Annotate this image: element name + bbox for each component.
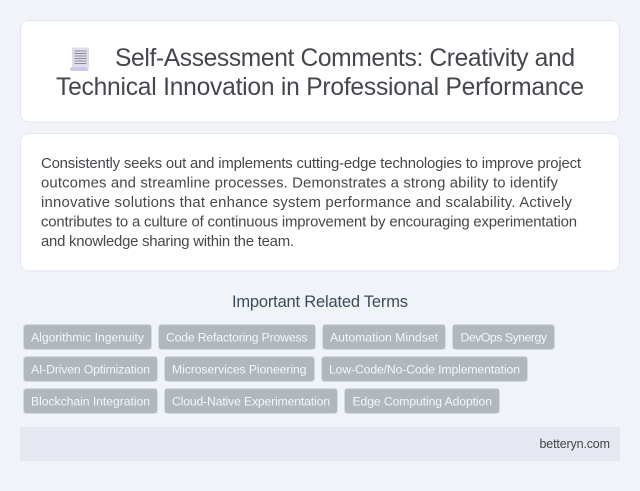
tag xyxy=(164,356,314,382)
description text: innovative solutions that enhance system performance and scalability. Actively xyxy=(41,195,573,211)
tag xyxy=(24,324,152,350)
title xyxy=(56,45,584,101)
description text: Consistently seeks out and implements cutting-edge technologies to improve project xyxy=(41,156,582,172)
tag: Code Refactoring Prowess xyxy=(166,330,308,344)
tag: Microservices Pioneering xyxy=(172,362,306,376)
description text: and knowledge sharing within the team. xyxy=(41,234,294,250)
icon: scroll document xyxy=(70,48,89,71)
tag: Low-Code/No-Code Implementation xyxy=(329,362,520,376)
tag xyxy=(24,356,158,382)
tag xyxy=(452,324,554,350)
tag xyxy=(322,356,528,382)
tag: Edge Computing Adoption xyxy=(352,394,492,408)
tag list xyxy=(24,324,554,414)
tag: Blockchain Integration xyxy=(31,394,150,408)
tag: Algorithmic Ingenuity xyxy=(31,330,145,344)
tag: Cloud-Native Experimentation xyxy=(172,394,330,408)
description text xyxy=(41,156,582,250)
panel: title card xyxy=(20,20,620,122)
tag xyxy=(158,324,316,350)
tag xyxy=(344,388,500,414)
tag xyxy=(24,388,158,414)
description text: outcomes and streamline processes. Demonstrates a strong ability to identify xyxy=(41,176,559,192)
heading: important related terms: Important Related Terms xyxy=(232,293,408,311)
description text: contributes to a culture of continuous improvement by encouraging experimentation xyxy=(41,214,577,230)
tag: DevOps Synergy xyxy=(460,330,548,344)
tag: Automation Mindset xyxy=(330,330,439,344)
title: Self-Assessment Comments: Creativity and xyxy=(115,45,575,72)
tag xyxy=(164,388,338,414)
panel: description card xyxy=(20,134,620,271)
tag: AI-Driven Optimization xyxy=(31,362,150,376)
footer source text: betteryn.com xyxy=(540,437,610,451)
footer bar xyxy=(20,427,620,461)
tag xyxy=(322,324,446,350)
title: Technical Innovation in Professional Performance xyxy=(56,74,584,101)
